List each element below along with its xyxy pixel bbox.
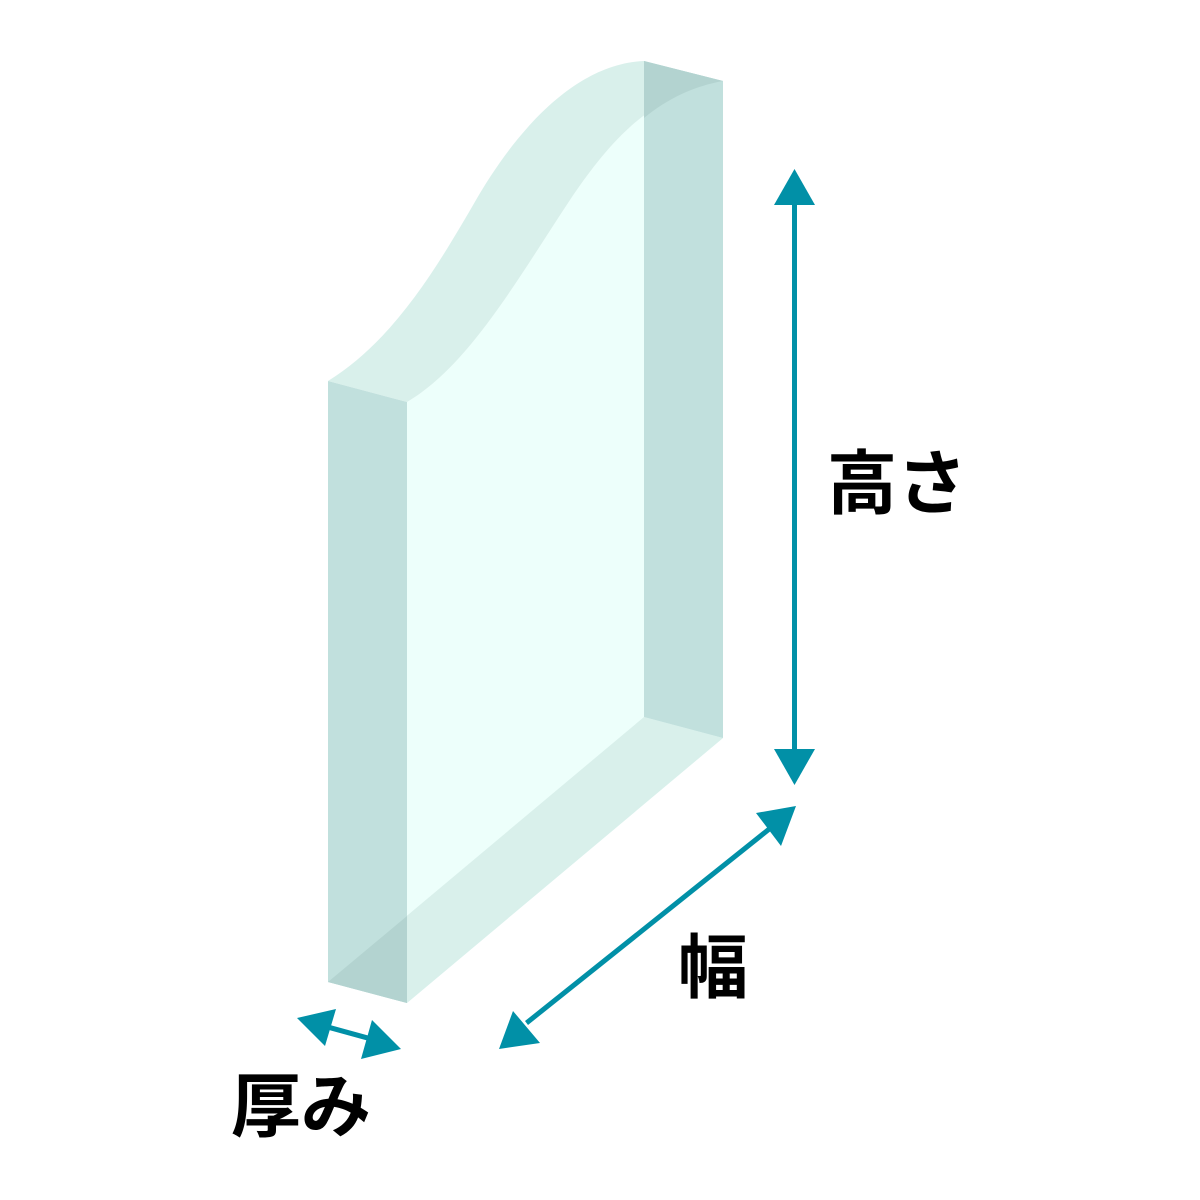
glass top corner overlap — [644, 61, 723, 118]
glass right edge — [644, 61, 723, 738]
glass left edge — [328, 381, 407, 1003]
arrow: width — [499, 806, 796, 1049]
label: height: 高さ — [827, 445, 967, 523]
arrow: height — [774, 169, 815, 785]
glass pane — [328, 61, 723, 1003]
glass top edge — [328, 61, 723, 402]
label: thickness: 厚み — [231, 1068, 371, 1146]
glass bottom corner overlap — [328, 916, 407, 1003]
label: width: 幅 — [678, 929, 748, 1007]
arrow: thickness — [297, 1009, 401, 1059]
glass bottom edge — [328, 717, 723, 1003]
glass front face — [407, 81, 723, 1003]
